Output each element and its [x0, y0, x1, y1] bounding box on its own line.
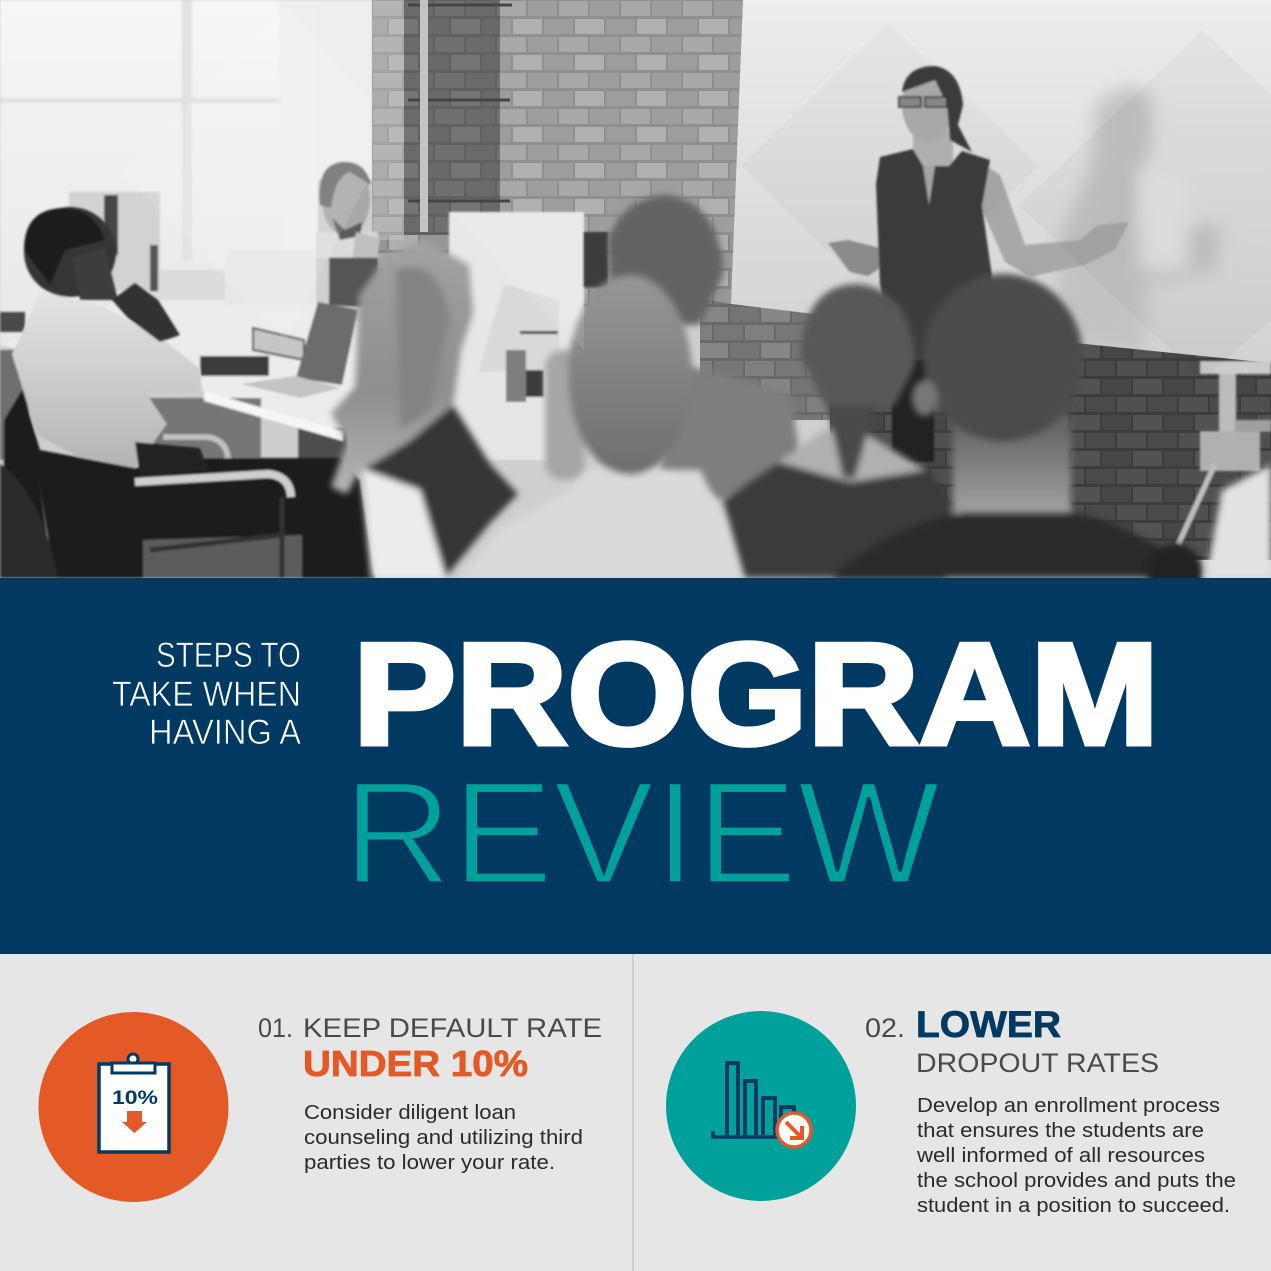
title lead-in text: STEPS TO	[156, 636, 301, 675]
photo: translucent diamond overlay	[280, 162, 584, 350]
photo: bright window at left	[0, 0, 372, 345]
step 02 body text: Develop an enrollment process	[917, 1095, 1220, 1117]
step 02 body text: student in a position to succeed.	[917, 1195, 1230, 1217]
step 02 heading: 02.	[865, 1013, 905, 1043]
photo: lower dark brick wall	[830, 344, 1271, 560]
title lead-in text: HAVING A	[149, 713, 302, 752]
step 01 body text: parties to lower your rate.	[304, 1152, 555, 1174]
photo: presenter speaking to a seated audience	[0, 0, 1271, 600]
step 01 heading: KEEP DEFAULT RATE	[303, 1013, 602, 1043]
step 02 body text: that ensures the students are	[917, 1120, 1204, 1142]
photo: foreground right sleeve	[1143, 462, 1271, 578]
panel: step 01	[38, 1012, 602, 1202]
title band	[0, 578, 1271, 954]
photo: easel at right	[1178, 361, 1271, 545]
step 01 body text	[304, 1102, 583, 1174]
photo: bald man in white shirt	[469, 272, 741, 576]
title lead-in text: TAKE WHEN	[112, 675, 301, 714]
title: REVIEW: REVIEW	[343, 751, 940, 914]
photo: presenter's shadow on board	[1051, 88, 1222, 352]
photo: monitors and desk	[0, 192, 608, 462]
step 01 body text: Consider diligent loan	[304, 1102, 516, 1124]
photo: presenter	[828, 66, 1129, 462]
photo: jacketed audience member	[660, 365, 802, 500]
photo: brick wall	[372, 0, 744, 310]
photo: blonde woman	[331, 240, 518, 578]
photo: whiteboard	[731, 0, 1271, 306]
step 01 body text: counseling and utilizing third	[304, 1127, 583, 1149]
photo: man in background	[316, 162, 380, 268]
step 01 heading: 01.	[258, 1013, 293, 1043]
icon: clipboard on orange circle: 10%	[112, 1088, 158, 1109]
step 01 heading	[258, 1013, 602, 1084]
panel: step 02	[666, 1004, 1236, 1217]
icon: clipboard on orange circle	[38, 1012, 228, 1202]
step 02 body text: the school provides and puts the	[917, 1170, 1236, 1192]
icon: falling bar chart on teal circle	[666, 1011, 856, 1201]
photo: woman with braid	[723, 284, 950, 578]
step 01 heading: UNDER 10%	[303, 1043, 528, 1084]
step 02 heading: LOWER	[916, 1004, 1061, 1045]
title lead-in text	[112, 636, 302, 752]
step 02 body text: well informed of all resources	[916, 1145, 1205, 1167]
photo: pale brick behind audience	[700, 298, 830, 420]
title: PROGRAM: PROGRAM	[353, 613, 1159, 775]
photo: head behind bald man	[608, 195, 723, 325]
photo: seated man with glasses at left	[0, 207, 375, 578]
step 02 heading: DROPOUT RATES	[916, 1048, 1159, 1078]
bottom panel background	[0, 954, 1271, 1271]
step 02 body text	[916, 1095, 1236, 1217]
photo: man in dark shirt at right	[831, 274, 1198, 578]
step 02 heading	[865, 1004, 1159, 1078]
